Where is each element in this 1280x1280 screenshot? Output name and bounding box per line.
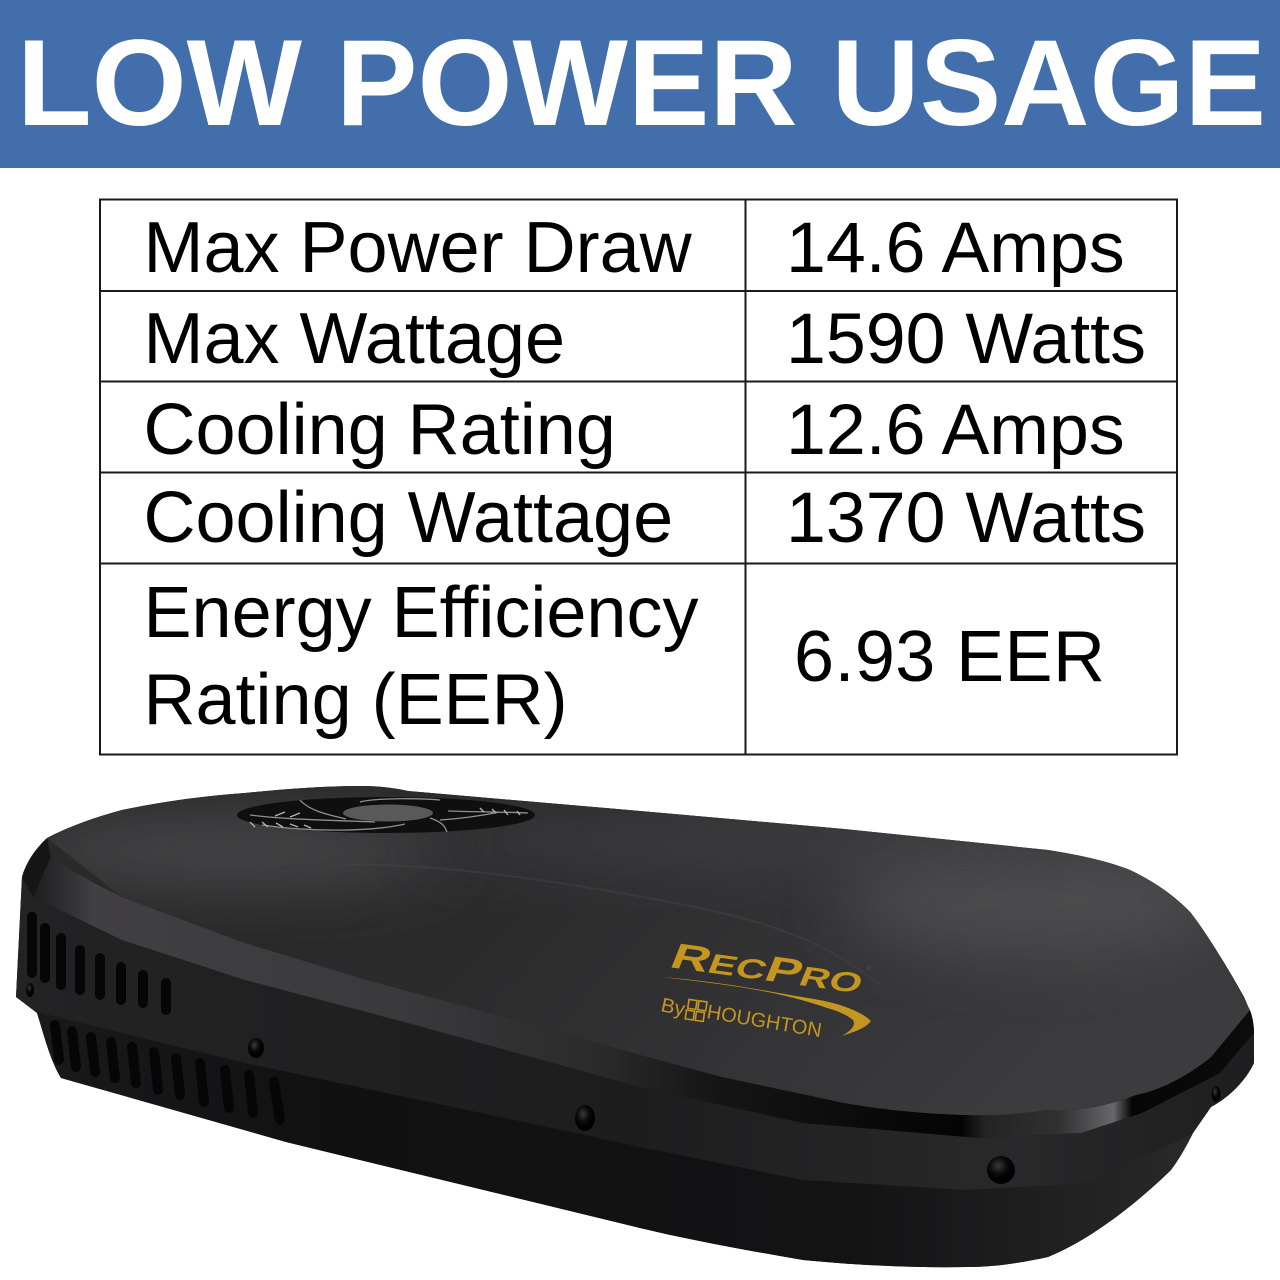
swoosh (662, 977, 871, 1036)
middle side band (16, 877, 1254, 1190)
product: rooftop air conditioner unit (10, 786, 1254, 1267)
title: LOW POWER USAGE (17, 14, 1266, 151)
row: energy efficiency rating (144, 573, 1105, 740)
row: max wattage: Max Wattage (144, 299, 565, 379)
row: cooling rating: Cooling Rating (144, 390, 616, 470)
roof fan (237, 797, 535, 833)
upper vents (32, 917, 166, 1010)
row: cooling wattage (144, 478, 1146, 558)
row: max wattage: 1590 Watts (786, 299, 1146, 379)
RecPro by Houghton logo: By (659, 994, 687, 1021)
unit silhouette (16, 786, 1254, 1267)
row: cooling wattage: 1370 Watts (786, 478, 1146, 558)
RecPro by Houghton logo: RECPRO (665, 936, 871, 1001)
lower vents (55, 1025, 280, 1120)
row: cooling wattage: Cooling Wattage (144, 478, 673, 558)
row: max wattage (144, 299, 1146, 379)
row: cooling rating: 12.6 Amps (786, 390, 1125, 470)
screws (26, 983, 1220, 1184)
houghton emblem (685, 999, 707, 1022)
RecPro by Houghton logo: HOUGHTON (705, 1001, 823, 1042)
row: energy efficiency rating: Energy Efficiency (144, 573, 698, 653)
glossy trim band (33, 857, 1254, 1138)
RecPro by Houghton logo: ® (866, 964, 873, 973)
row: energy efficiency rating: 6.93 EER (794, 617, 1105, 697)
row: max power draw: 14.6 Amps (786, 208, 1125, 288)
specifications table (100, 199, 1177, 755)
matte top cover (47, 786, 1250, 1115)
RecPro by Houghton logo (659, 936, 873, 1042)
lower base shell (37, 1012, 1193, 1267)
row: cooling rating (144, 390, 1125, 470)
fan hub (343, 804, 433, 822)
row: max power draw (144, 208, 1125, 288)
header banner (0, 0, 1280, 168)
row: max power draw: Max Power Draw (144, 208, 693, 288)
row: energy efficiency rating: Rating (EER) (144, 660, 568, 740)
cover highlights (10, 816, 1220, 985)
